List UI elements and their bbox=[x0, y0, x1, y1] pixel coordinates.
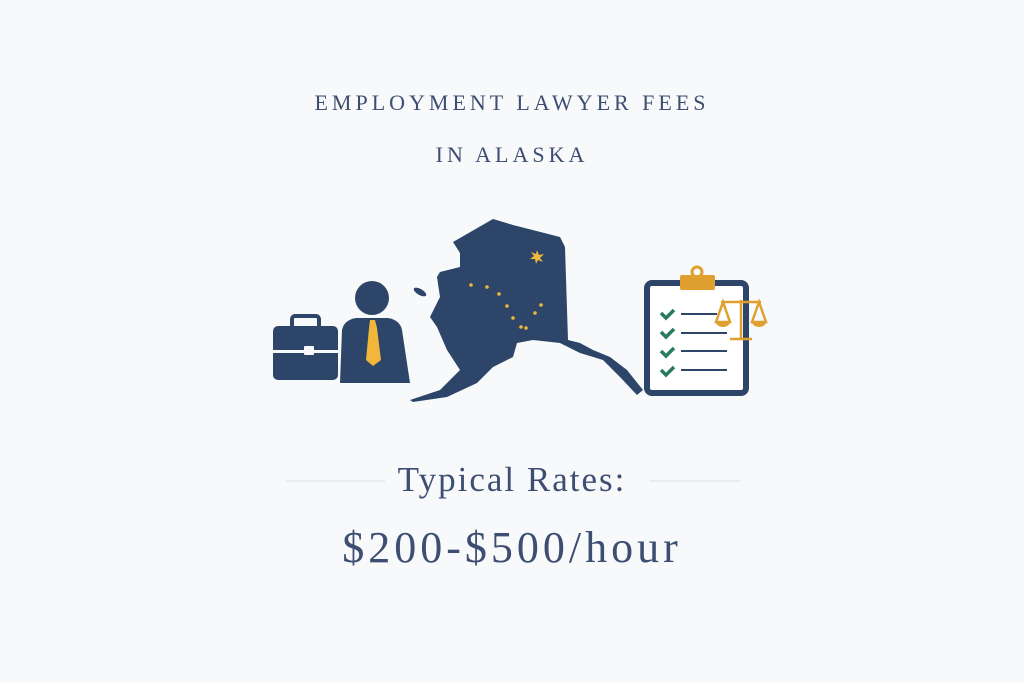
map: Alaska bbox=[410, 219, 643, 402]
icon: clipboard with scales bbox=[647, 267, 766, 393]
title: EMPLOYMENT LAWYER FEES bbox=[314, 90, 710, 115]
heading: typical rates: Typical Rates: bbox=[398, 460, 626, 499]
icon: person with tie bbox=[340, 281, 410, 383]
subtitle: IN ALASKA bbox=[436, 142, 588, 167]
decorative lines bbox=[285, 480, 385, 482]
icon: briefcase bbox=[273, 316, 338, 380]
text: rate range: $200-$500/hour bbox=[342, 523, 682, 572]
